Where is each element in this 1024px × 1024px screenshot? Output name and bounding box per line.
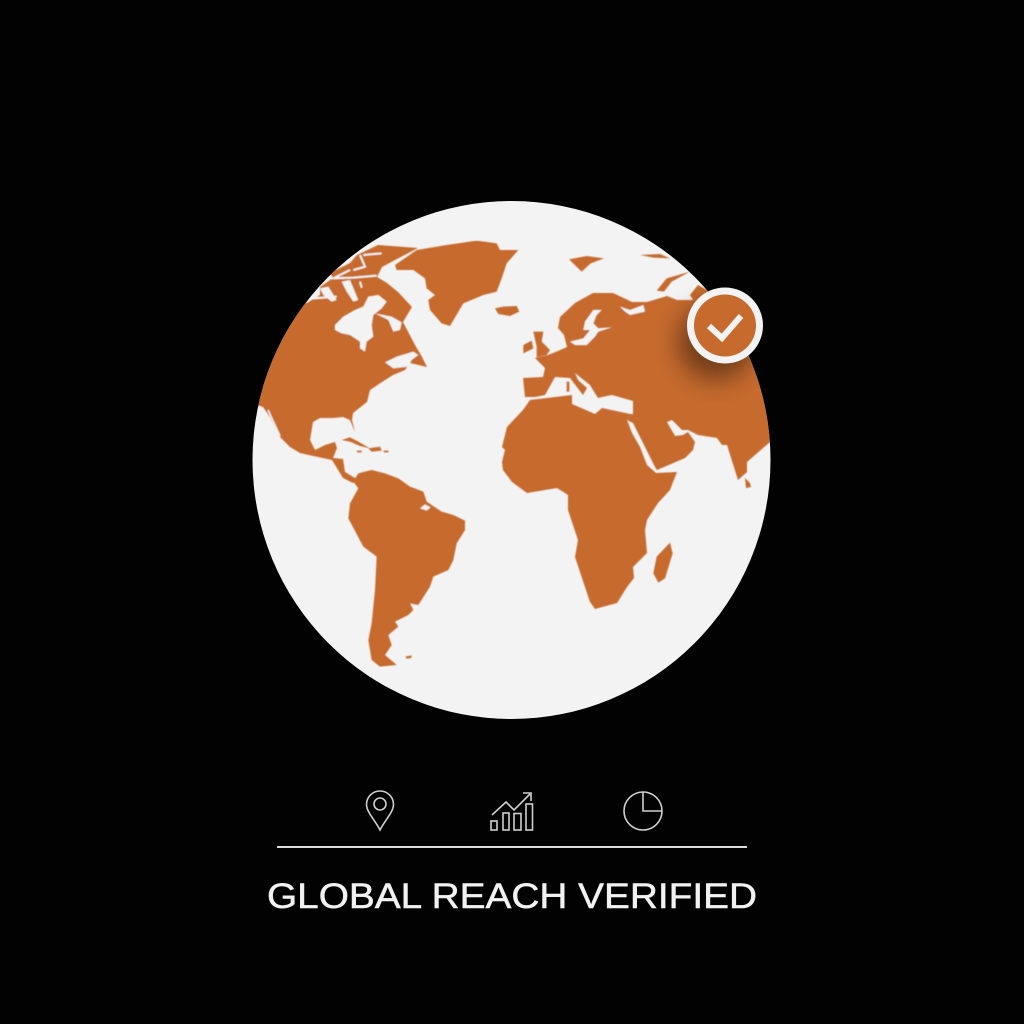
divider line	[277, 846, 747, 848]
icon: check mark	[709, 316, 741, 338]
globe	[240, 201, 800, 719]
map: North America	[240, 245, 427, 483]
verified check badge	[687, 288, 763, 364]
infographic canvas	[252, 201, 770, 908]
icon: location pin	[366, 791, 394, 830]
title: GLOBAL REACH VERIFIED	[267, 876, 757, 916]
map: Caribbean islands	[342, 437, 388, 452]
icon: growth bar chart	[491, 793, 532, 830]
map: Africa	[502, 395, 677, 609]
map: South America	[348, 470, 465, 667]
map: Eurasia	[523, 254, 800, 488]
badge drop shadow	[678, 304, 754, 380]
map: Madagascar	[653, 543, 673, 583]
map: Greenland and Iceland	[395, 241, 519, 326]
icon: pie chart	[624, 792, 662, 830]
